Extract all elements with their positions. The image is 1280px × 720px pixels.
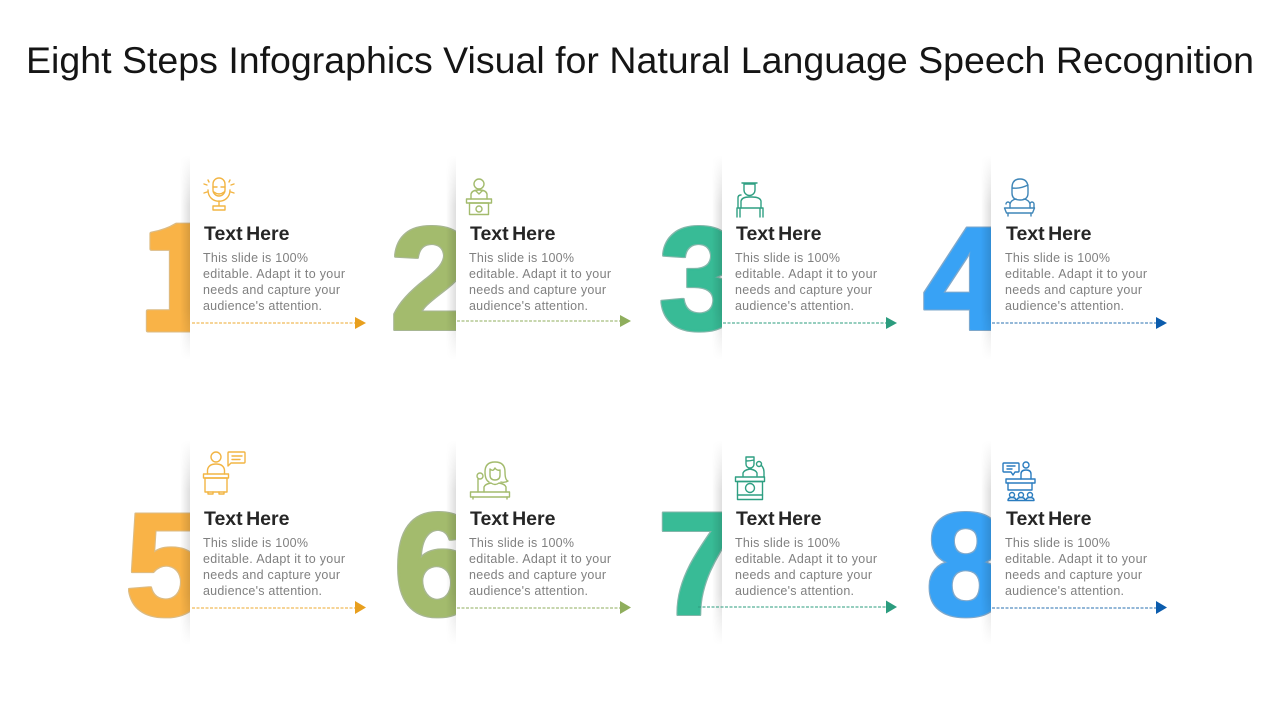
body text 1: [203, 251, 345, 313]
body text 3: editable. Adapt it to your: [735, 267, 877, 281]
step 2: [393, 168, 631, 346]
card 6: [456, 435, 646, 650]
body text 5: needs and capture your: [203, 568, 340, 582]
card 2: [456, 150, 646, 365]
body text 4: This slide is 100%: [1005, 251, 1110, 265]
body text 1: audience's attention.: [203, 299, 322, 313]
card 7: [722, 435, 912, 650]
body text 5: editable. Adapt it to your: [203, 552, 345, 566]
arrow 6: [457, 601, 631, 614]
body text 6: needs and capture your: [469, 568, 606, 582]
card shadow 8: [984, 454, 991, 632]
heading 3: Text Here: [736, 223, 822, 245]
arrow 1: [192, 317, 366, 329]
body text 4: [1005, 251, 1147, 313]
body text 4: audience's attention.: [1005, 299, 1124, 313]
body text 6: audience's attention.: [469, 584, 588, 598]
body text 2: needs and capture your: [469, 283, 606, 297]
numeral 8: 8: [926, 483, 1006, 646]
icon: presenter with audience: [1003, 462, 1035, 500]
body text 5: [203, 536, 345, 598]
arrow 3: [723, 317, 897, 329]
body text 2: This slide is 100%: [469, 251, 574, 265]
body text 1: needs and capture your: [203, 283, 340, 297]
card shadow 3: [714, 168, 722, 346]
heading 2: Text Here: [470, 223, 556, 245]
body text 5: audience's attention.: [203, 584, 322, 598]
heading 8: Text Here: [1006, 508, 1092, 530]
step 3: [660, 168, 897, 346]
body text 8: [1005, 536, 1147, 598]
body text 3: This slide is 100%: [735, 251, 840, 265]
body text 8: editable. Adapt it to your: [1005, 552, 1147, 566]
body text 3: audience's attention.: [735, 299, 854, 313]
icon: woman speaker: [470, 462, 510, 499]
numeral 5: 5: [126, 483, 207, 646]
body text 8: audience's attention.: [1005, 584, 1124, 598]
arrow 7: [698, 600, 897, 614]
arrow 8: [992, 601, 1167, 614]
card shadow 7: [714, 454, 722, 632]
body text 7: [735, 536, 877, 598]
body text 8: This slide is 100%: [1005, 536, 1110, 550]
icon: speaker at lectern: [1004, 179, 1034, 216]
body text 3: [735, 251, 877, 313]
heading 7: Text Here: [736, 508, 822, 530]
card 1: [190, 150, 380, 365]
step 5: [128, 451, 366, 632]
heading 1: Text Here: [204, 223, 290, 245]
card 4: [991, 150, 1181, 365]
arrow 4: [992, 317, 1167, 329]
heading 6: Text Here: [470, 508, 556, 530]
arrow 2: [457, 315, 631, 327]
icon: microphone: [204, 178, 234, 210]
card 3: [722, 150, 912, 365]
body text 4: editable. Adapt it to your: [1005, 267, 1147, 281]
card 8: [991, 435, 1181, 650]
numeral 3: 3: [659, 197, 740, 360]
body text 2: editable. Adapt it to your: [469, 267, 611, 281]
numeral 7: 7: [658, 482, 739, 645]
step 7: [662, 454, 897, 632]
body text 6: editable. Adapt it to your: [469, 552, 611, 566]
numeral 4: 4: [923, 197, 1004, 360]
card shadow 6: [448, 454, 456, 632]
body text 6: [469, 536, 611, 598]
card shadow 1: [182, 168, 190, 346]
heading 5: Text Here: [204, 508, 290, 530]
body text 3: needs and capture your: [735, 283, 872, 297]
numeral 6: 6: [394, 482, 479, 646]
card 5: [190, 435, 380, 650]
icon: speaker with microphone: [737, 183, 763, 217]
step 6: [397, 454, 631, 632]
card shadow 2: [448, 168, 456, 346]
body text 1: editable. Adapt it to your: [203, 267, 345, 281]
card shadow 5: [182, 454, 190, 632]
title: Eight Steps Infographics Visual for Natural Language Speech Recognition: [26, 39, 1254, 81]
step 1: [146, 168, 366, 346]
body text 7: needs and capture your: [735, 568, 872, 582]
body text 1: This slide is 100%: [203, 251, 308, 265]
body text 7: This slide is 100%: [735, 536, 840, 550]
icon: presenter at podium: [466, 179, 492, 214]
numeral 1: 1: [137, 164, 222, 372]
body text 8: needs and capture your: [1005, 568, 1142, 582]
body text 7: audience's attention.: [735, 584, 854, 598]
card shadow 4: [984, 168, 991, 346]
numeral 2: 2: [390, 198, 474, 361]
body text 4: needs and capture your: [1005, 283, 1142, 297]
step 8: [928, 454, 1167, 632]
step 4: [923, 168, 1167, 346]
body text 2: [469, 251, 611, 313]
body text 5: This slide is 100%: [203, 536, 308, 550]
icon: presenter with speech bubble: [204, 452, 245, 494]
icon: speaker at podium: [736, 457, 764, 500]
body text 7: editable. Adapt it to your: [735, 552, 877, 566]
arrow 5: [192, 601, 366, 614]
body text 6: This slide is 100%: [469, 536, 574, 550]
heading 4: Text Here: [1006, 223, 1092, 245]
body text 2: audience's attention.: [469, 299, 588, 313]
